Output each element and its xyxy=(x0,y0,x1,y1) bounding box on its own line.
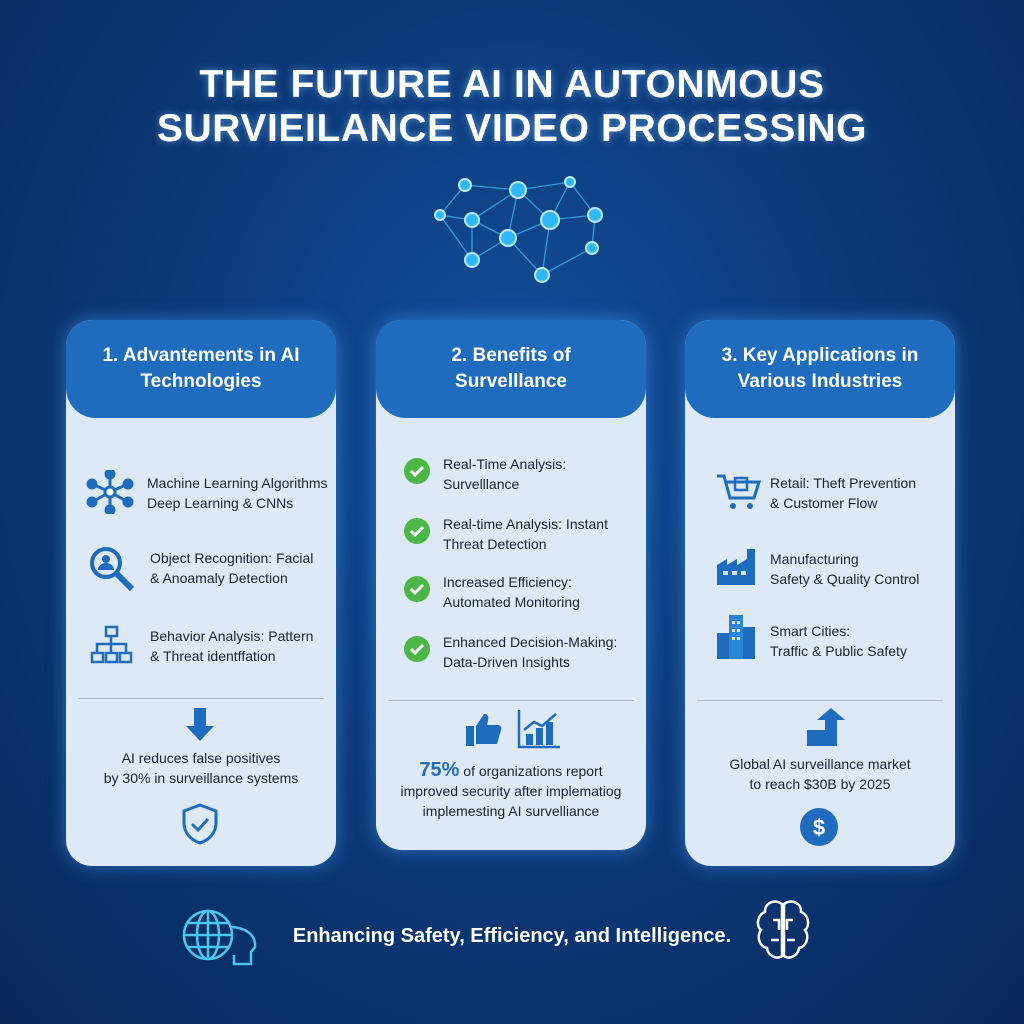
item: threat detection: Threat Detection xyxy=(443,536,546,552)
item: real-time analysis: Real-Time Analysis: xyxy=(443,456,566,472)
item: retail xyxy=(717,474,916,511)
heading: applications xyxy=(685,320,955,418)
stat: market: to reach $30B by 2025 xyxy=(750,776,890,792)
stat: false positives: AI reduces false positives xyxy=(122,750,280,766)
stat: 75% xyxy=(400,759,621,819)
network graphic xyxy=(434,176,603,283)
heading: applications: 3. Key Applications in xyxy=(722,345,918,366)
item: object recognition xyxy=(90,547,313,592)
title: THE FUTURE AI IN AUTONMOUS xyxy=(199,63,825,106)
stat: 75%: 75% of organizations report xyxy=(419,759,603,781)
item: machine learning: Machine Learning Algorithms xyxy=(147,475,328,491)
item: object recognition: & Anoamaly Detection xyxy=(150,570,288,586)
stat: false positives xyxy=(104,750,298,786)
icon: dollar: $ xyxy=(813,815,825,840)
icon: down arrow xyxy=(186,708,214,741)
stat: market: Global AI surveillance market xyxy=(729,756,911,772)
heading: benefits: 2. Benefits of xyxy=(451,345,571,366)
item: behavior analysis: & Threat identffation xyxy=(150,648,276,664)
panel: applications xyxy=(685,320,955,866)
item: efficiency xyxy=(404,574,580,610)
item: retail: & Customer Flow xyxy=(770,495,877,511)
footer tagline: Enhancing Safety, Efficiency, and Intelligence. xyxy=(293,925,731,947)
item: efficiency: Automated Monitoring xyxy=(443,594,580,610)
icon: bar chart xyxy=(518,710,560,748)
heading: benefits xyxy=(376,320,646,418)
stat: false positives: by 30% in surveillance systems xyxy=(104,770,298,786)
icon: shield xyxy=(182,803,218,845)
item: machine learning xyxy=(86,470,328,514)
item: manufacturing: Safety & Quality Control xyxy=(770,571,919,587)
stat: market xyxy=(729,756,911,792)
item: machine learning: Deep Learning & CNNs xyxy=(147,495,293,511)
heading: advancements: Technologies xyxy=(140,371,262,392)
stat: 75%: implemesting AI survelliance xyxy=(423,803,599,819)
item: manufacturing: Manufacturing xyxy=(770,551,859,567)
item: smart cities: Smart Cities: xyxy=(770,623,850,639)
heading: benefits: Survelllance xyxy=(455,371,567,392)
icon: brain xyxy=(756,900,810,959)
item: decision making xyxy=(404,634,617,670)
title xyxy=(156,63,868,150)
item: real-time analysis: Survelllance xyxy=(443,476,519,492)
panel: benefits xyxy=(376,320,646,850)
icon: globe head xyxy=(182,910,256,966)
item: decision making: Data-Driven Insights xyxy=(443,654,570,670)
item: behavior analysis: Behavior Analysis: Pattern xyxy=(150,628,313,644)
icon: dollar xyxy=(800,808,838,846)
item: smart cities xyxy=(717,615,907,659)
heading: advancements xyxy=(66,320,336,418)
icon: up arrow xyxy=(807,708,845,746)
item: threat detection xyxy=(404,516,608,552)
item: object recognition: Object Recognition: Facial xyxy=(150,550,313,566)
item: efficiency: Increased Efficiency: xyxy=(443,574,572,590)
panel: advancements xyxy=(66,320,336,866)
heading: applications: Various Industries xyxy=(738,371,902,392)
heading: advancements: 1. Advantements in AI xyxy=(102,345,300,366)
item: threat detection: Real-time Analysis: Instant xyxy=(443,516,608,532)
item: manufacturing xyxy=(717,549,919,587)
item: retail: Retail: Theft Prevention xyxy=(770,475,916,491)
item: smart cities: Traffic & Public Safety xyxy=(770,643,907,659)
stat: 75%: improved security after implematiog xyxy=(400,783,621,799)
item: real-time analysis xyxy=(404,456,566,492)
title: SURVIEILANCE VIDEO PROCESSING xyxy=(157,107,867,150)
item: behavior analysis xyxy=(90,626,313,664)
item: decision making: Enhanced Decision-Making: xyxy=(443,634,617,650)
icon: thumbs up xyxy=(466,714,502,746)
